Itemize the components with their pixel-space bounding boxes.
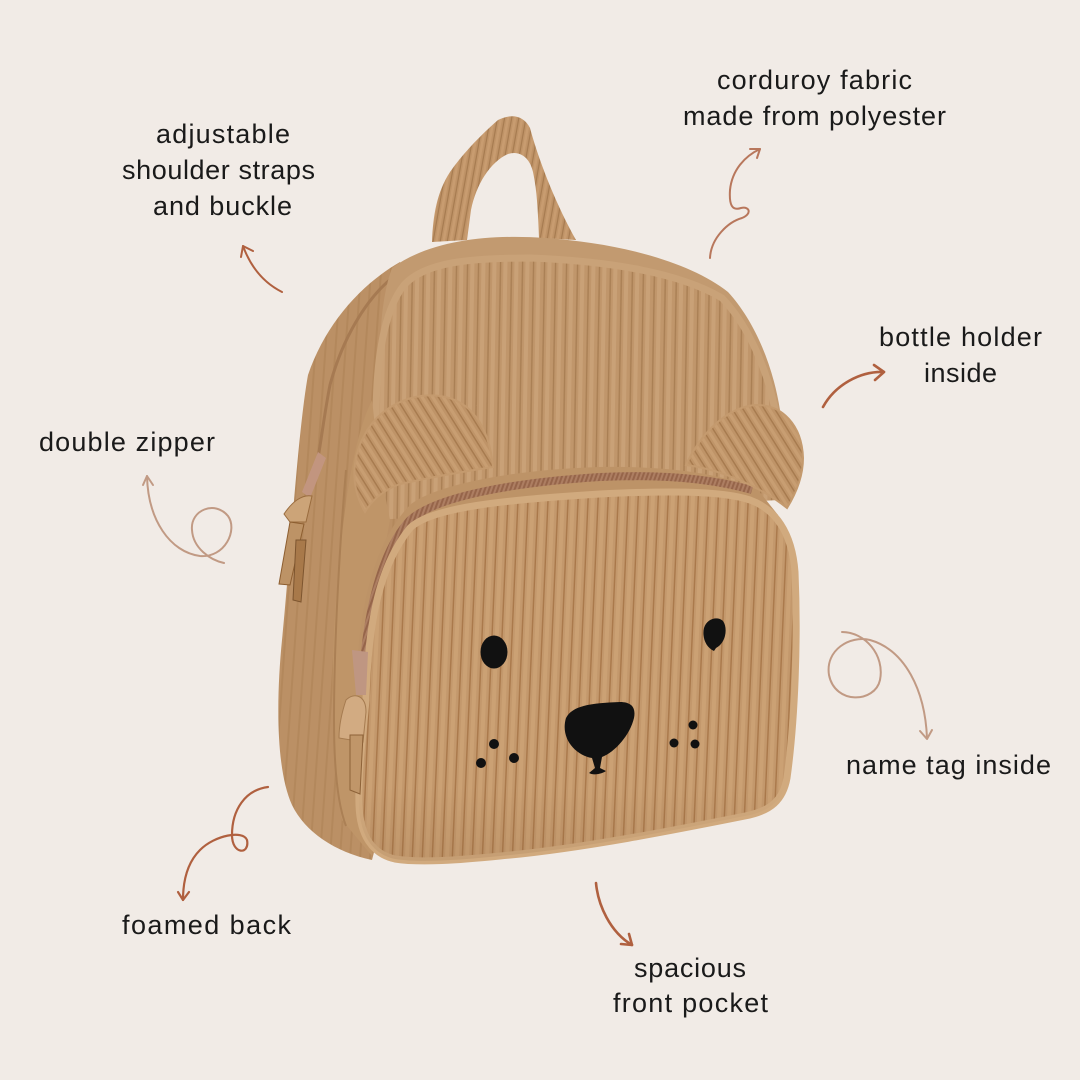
panel piping (376, 258, 776, 420)
arrow: to corduroy fabric (710, 149, 760, 258)
label: name tag inside: name tag inside (846, 750, 1051, 780)
handle (432, 116, 576, 242)
label: foamed back: foamed back (122, 910, 292, 940)
label: double zipper: double zipper (39, 427, 215, 457)
arrow: to foamed back (178, 787, 268, 900)
label: corduroy fabric made from polyester: made from polyester (683, 101, 946, 131)
label: adjustable shoulder straps and buckle: and buckle (153, 191, 292, 221)
label: spacious front pocket: front pocket (613, 988, 768, 1018)
left eye (480, 636, 508, 668)
backpack illustration (278, 116, 803, 861)
right eye (703, 618, 726, 651)
top gusset (379, 237, 780, 420)
gusset seam (334, 470, 346, 826)
left ear (354, 395, 493, 512)
label: bottle holder inside (879, 322, 1042, 388)
nose (565, 702, 634, 774)
pocket shading (359, 492, 796, 861)
label: adjustable shoulder straps and buckle: adjustable (156, 119, 290, 149)
label: corduroy fabric made from polyester (683, 65, 946, 131)
left whisker dots (476, 739, 519, 768)
front pocket (359, 492, 796, 861)
pocket gusset (356, 467, 778, 680)
arrow: to name tag (829, 632, 932, 739)
label: bottle holder inside: bottle holder (879, 322, 1042, 352)
label: spacious front pocket: spacious (634, 953, 746, 983)
label: spacious front pocket (613, 953, 768, 1018)
label: bottle holder inside: inside (924, 358, 997, 388)
side zipper pull (279, 452, 326, 602)
arrow: to bottle holder (823, 365, 884, 407)
front pocket zipper (362, 476, 752, 690)
main front panel (370, 260, 780, 520)
side panel (278, 262, 440, 860)
label: corduroy fabric made from polyester: corduroy fabric (717, 65, 912, 95)
arrow: to shoulder straps (241, 246, 282, 292)
right whisker dots (670, 720, 700, 748)
label: adjustable shoulder straps and buckle: shoulder straps (122, 155, 315, 185)
arrow: to double zipper (143, 476, 231, 563)
pocket zipper pull (339, 650, 368, 794)
main body zipper seam (318, 278, 392, 458)
side gusset between panel and pocket (333, 400, 390, 856)
label: adjustable shoulder straps and buckle (122, 119, 315, 221)
right ear (686, 405, 803, 508)
arrow: to front pocket (596, 883, 632, 945)
